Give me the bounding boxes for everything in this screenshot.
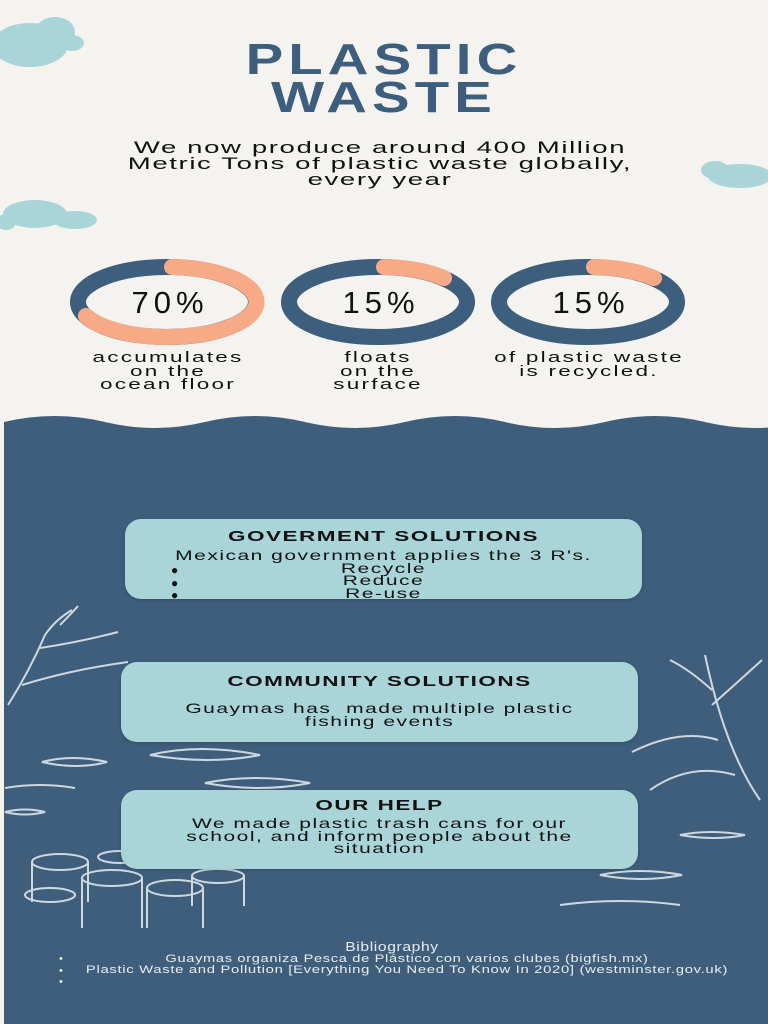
bibliography: •	[59, 953, 63, 965]
text: on the	[340, 362, 416, 380]
box: government solutions: Re-use	[345, 584, 422, 600]
donut charts: 15%	[342, 285, 420, 320]
box: government solutions	[125, 519, 642, 599]
box: community solutions	[121, 662, 638, 742]
box: our help: situation	[334, 840, 425, 856]
subtitle: We now produce around 400 Million	[134, 138, 626, 157]
bibliography	[59, 940, 728, 988]
subtitle	[128, 138, 632, 189]
title	[246, 35, 522, 122]
donut labels: ocean floor	[100, 376, 236, 393]
box: community solutions: Guaymas has made multiple plastic	[185, 700, 574, 716]
clouds	[0, 17, 768, 230]
donut charts: 70%	[131, 285, 209, 320]
box: government solutions: Reduce	[343, 572, 424, 588]
subtitle: Metric Tons of plastic waste globally,	[128, 154, 632, 173]
box: government solutions: GOVERMENT SOLUTIONS	[228, 528, 539, 545]
text: floats	[344, 349, 412, 366]
box: community solutions: fishing events	[305, 712, 454, 728]
bibliography: Guaymas organiza Pesca de Plástico con varios clubes (bigfish.mx)	[165, 952, 649, 964]
decorations: seaweed, coral, fish, sponges	[5, 606, 762, 928]
title: PLASTIC	[246, 35, 522, 84]
box: our help: school, and inform people about the	[186, 828, 573, 844]
box: our help	[121, 790, 638, 869]
bibliography: Bibliography	[345, 940, 439, 954]
text: is recycled.	[519, 362, 659, 380]
bibliography: Plastic Waste and Pollution [Everything You Need To Know In 2020] (westminster.gov.uk)	[86, 964, 728, 976]
box: government solutions: ●	[171, 588, 178, 602]
box: community solutions: COMMUNITY SOLUTIONS	[227, 673, 532, 690]
text: surface	[333, 376, 423, 393]
donut labels	[92, 349, 244, 393]
box: government solutions: Mexican government applies the 3 R's.	[175, 547, 592, 563]
box: government solutions: ●	[171, 563, 178, 577]
donut labels: on the	[130, 362, 206, 380]
text: •	[59, 976, 63, 988]
donut charts: 15%	[552, 285, 630, 320]
text: of plastic waste	[494, 349, 684, 366]
box: government solutions: Recycle	[341, 560, 426, 576]
ocean background	[4, 416, 768, 1024]
box: our help: We made plastic trash cans for our	[192, 815, 567, 831]
donut charts	[70, 259, 685, 345]
box: our help: OUR HELP	[315, 797, 444, 814]
bibliography: •	[59, 964, 63, 976]
donut labels: accumulates	[92, 349, 244, 366]
box: government solutions: ●	[171, 576, 178, 590]
subtitle: every year	[308, 170, 452, 189]
title: WASTE	[271, 73, 497, 122]
